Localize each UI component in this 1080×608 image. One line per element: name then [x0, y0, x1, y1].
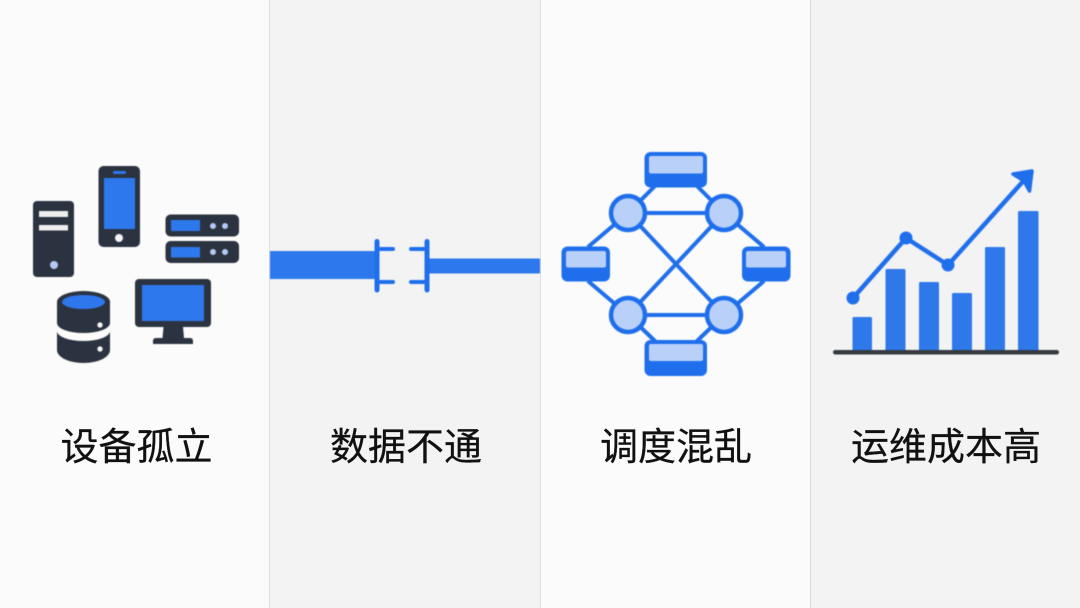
panel: high operating cost: [833, 171, 1059, 469]
icon: tangled network: [562, 152, 790, 376]
bar chart: rising costs: [833, 171, 1059, 354]
icon: tower computer: [33, 201, 74, 277]
panel: isolated devices: [33, 166, 239, 469]
icon: database: [57, 291, 110, 363]
label: device isolation: 设备孤立: [60, 427, 213, 469]
icon: smartphone: [98, 166, 140, 247]
icon: broken pipe connector: [270, 242, 540, 290]
label: data not connected: 数据不通: [330, 427, 482, 469]
panel: data disconnected: [270, 242, 540, 469]
label: high operations cost: 运维成本高: [851, 427, 1041, 469]
icon: desktop monitor: [135, 279, 211, 344]
label: scheduling chaos: 调度混乱: [600, 427, 752, 469]
icon: rack server: [166, 214, 239, 263]
panel: chaotic scheduling: [562, 152, 790, 469]
